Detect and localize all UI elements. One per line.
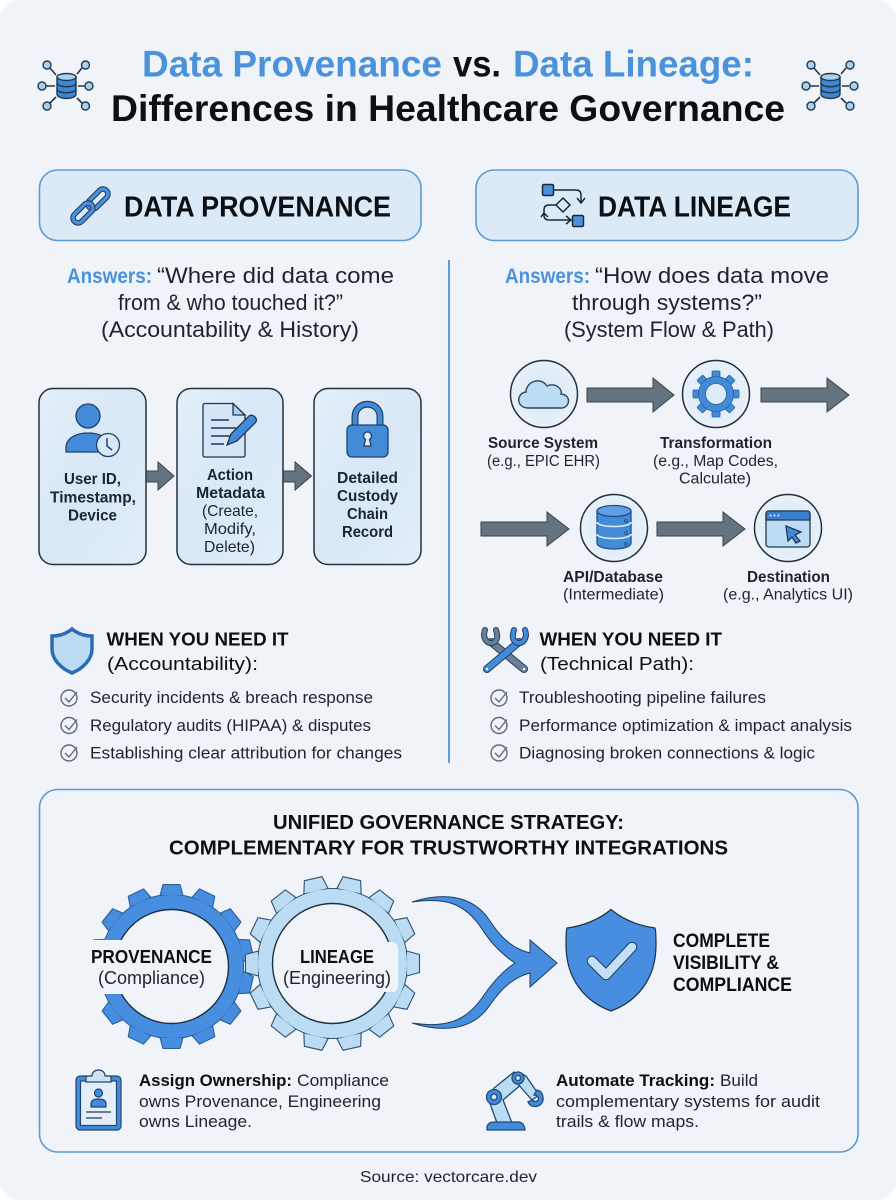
icon: padlock	[347, 404, 388, 457]
text block: provenance answers	[67, 263, 394, 342]
node: destination: Destination	[747, 569, 830, 586]
text block: lineage answers	[505, 263, 829, 342]
icon: database	[597, 506, 631, 549]
text: complete visibility and compliance: COMPLETE	[673, 931, 770, 952]
node: api database	[563, 494, 664, 604]
card: action metadata: Delete)	[204, 539, 255, 556]
checklist: Troubleshooting pipeline failures	[519, 689, 766, 707]
icon: gear	[693, 371, 739, 417]
card: user id: Timestamp,	[50, 490, 136, 506]
card: custody record: Detailed	[337, 470, 398, 487]
icon: clipboard	[76, 1070, 121, 1130]
text block: lineage answers: Answers:	[505, 264, 590, 288]
node: transformation: Transformation	[660, 435, 772, 452]
panel header: data provenance: DATA PROVENANCE	[124, 192, 391, 224]
node: destination	[723, 494, 853, 604]
icon: shield	[52, 629, 92, 673]
text: automate tracking: Build	[720, 1072, 758, 1090]
node: destination: (e.g., Analytics UI)	[723, 586, 853, 604]
icon: crossed wrenches	[484, 630, 526, 670]
text block: provenance answers: “Where did data come	[157, 263, 394, 288]
node: api database: (Intermediate)	[563, 586, 664, 604]
card: user id	[39, 388, 146, 564]
card: custody record: Record	[342, 524, 393, 541]
card: custody record: Custody	[337, 488, 398, 505]
gear: lineage	[246, 876, 420, 1051]
checklist: Performance optimization & impact analysis	[519, 717, 852, 735]
panel header: data lineage	[476, 170, 858, 240]
checklist: Diagnosing broken connections & logic	[519, 744, 815, 762]
checklist: Regulatory audits (HIPAA) & disputes	[90, 717, 371, 735]
source line: Source: vectorcare.dev	[360, 1169, 537, 1186]
title: Data Lineage:	[513, 44, 754, 84]
text: complete visibility and compliance	[673, 931, 792, 996]
node: api database: API/Database	[563, 569, 663, 586]
node: transformation	[653, 360, 778, 488]
checklist	[491, 689, 852, 762]
icon: document and pencil	[203, 404, 256, 457]
icon: database network right	[802, 61, 858, 110]
node: transformation: Calculate)	[679, 470, 751, 488]
checklist: Security incidents & breach response	[90, 689, 373, 707]
checklist	[61, 689, 402, 762]
arrow: database to destination	[657, 512, 745, 546]
arrow: action to record	[284, 462, 312, 490]
text: complete visibility and compliance: COMPLIANCE	[673, 975, 792, 996]
text: assign ownership	[139, 1072, 389, 1131]
card: user id: Device	[68, 508, 117, 524]
card: action metadata: Metadata	[196, 485, 265, 502]
text block: lineage answers: through systems?”	[572, 290, 762, 315]
text block: lineage answers: “How does data move	[595, 263, 829, 288]
arrow: continuation to database	[481, 512, 569, 546]
gear: provenance: PROVENANCE	[91, 947, 212, 967]
arrow: source to transformation	[587, 378, 674, 412]
panel: unified governance strategy	[40, 790, 858, 1152]
card: action metadata: Action	[207, 467, 253, 484]
text block: provenance answers: (Accountability & History)	[101, 317, 359, 342]
text block: lineage answers: (System Flow & Path)	[564, 317, 774, 342]
title: vs.	[453, 44, 501, 84]
card: custody record	[314, 388, 421, 564]
arrow: transformation onward	[761, 378, 849, 412]
icon: shield with check	[566, 910, 656, 1011]
icon: flow diagram	[541, 184, 585, 226]
icon: cloud	[519, 381, 569, 408]
title	[111, 44, 785, 129]
panel header: data provenance	[40, 170, 421, 240]
section: when you need it, technical path: WHEN YOU NEED IT	[540, 628, 723, 650]
icon: browser window	[766, 511, 810, 547]
arrow: merging into shield	[412, 897, 557, 1028]
gear: provenance: (Compliance)	[98, 968, 205, 988]
section: when you need it, technical path: (Technical Path):	[540, 653, 694, 674]
gear: lineage: LINEAGE	[300, 947, 374, 967]
card: action metadata: (Create,	[202, 503, 258, 520]
panel header: data lineage: DATA LINEAGE	[598, 192, 791, 224]
card: custody record: Chain	[347, 506, 388, 523]
panel heading	[169, 811, 728, 860]
text: automate tracking: Automate Tracking:	[556, 1072, 715, 1090]
card: action metadata	[177, 388, 283, 564]
section: when you need it, accountability	[52, 628, 402, 762]
section: when you need it, technical path	[484, 628, 852, 762]
text: automate tracking: trails & flow maps.	[556, 1113, 699, 1131]
text: automate tracking: complementary systems for audit	[556, 1093, 820, 1111]
icon: chain link	[71, 187, 110, 225]
text: assign ownership: owns Provenance, Engineering	[139, 1093, 381, 1111]
text: assign ownership: owns Lineage.	[139, 1113, 252, 1131]
icon: database network left	[38, 61, 93, 110]
text: complete visibility and compliance: VISIBILITY &	[673, 953, 779, 974]
panel heading: COMPLEMENTARY FOR TRUSTWORTHY INTEGRATIONS	[169, 836, 728, 860]
node: transformation: (e.g., Map Codes,	[653, 453, 778, 470]
section: when you need it, accountability: WHEN YOU NEED IT	[106, 628, 289, 650]
node: source system: (e.g., EPIC EHR)	[487, 453, 600, 470]
title: Data Provenance	[142, 44, 442, 84]
icon: user with clock	[66, 404, 120, 456]
panel heading: UNIFIED GOVERNANCE STRATEGY:	[273, 811, 624, 834]
icon: robot arm	[486, 1072, 543, 1130]
text block: provenance answers: Answers:	[67, 264, 152, 288]
gear: provenance	[80, 884, 254, 1048]
node: source system	[487, 360, 600, 470]
card: action metadata: Modify,	[204, 521, 256, 538]
text: automate tracking	[556, 1072, 820, 1131]
section: when you need it, accountability: (Accountability):	[107, 653, 258, 674]
arrow: user to action	[146, 462, 174, 490]
gear: lineage: (Engineering)	[283, 968, 391, 988]
card: user id: User ID,	[64, 471, 121, 488]
text: assign ownership: Assign Ownership:	[139, 1072, 292, 1090]
text: assign ownership: Compliance	[297, 1072, 389, 1090]
checklist: Establishing clear attribution for changes	[90, 744, 402, 762]
title: Differences in Healthcare Governance	[111, 88, 785, 129]
node: source system: Source System	[488, 435, 598, 452]
text block: provenance answers: from & who touched it?”	[118, 290, 343, 315]
